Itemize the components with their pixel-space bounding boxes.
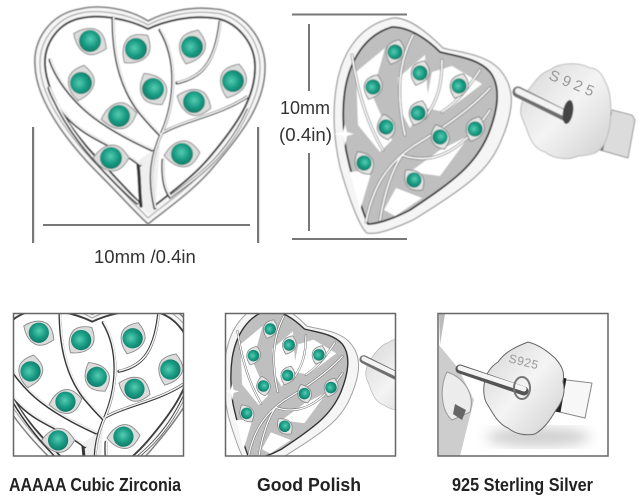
front view heart earring: [35, 7, 265, 224]
height dimension top line: [292, 14, 407, 16]
width label: 10mm /0.4in: [94, 246, 196, 267]
caption: sterling silver: 925 Sterling Silver: [452, 475, 593, 495]
height dimension lower stroke: [308, 153, 310, 231]
height label: [279, 98, 332, 145]
side view heart earring with back clasp: [334, 18, 635, 233]
height label: 10mm: [280, 98, 330, 118]
caption: good polish: Good Polish: [257, 475, 361, 495]
panel: 925 sterling silver detail: S925: [507, 351, 540, 372]
width dimension right tick: [257, 127, 259, 243]
panel: 925 sterling silver detail: [438, 314, 608, 456]
height dimension bottom line: [292, 238, 407, 240]
panel: cubic zirconia detail: [12, 312, 184, 457]
caption: cubic zirconia: AAAAA Cubic Zirconia: [9, 475, 182, 495]
height dimension upper stroke: [308, 24, 310, 91]
panel: good polish detail: [224, 312, 396, 457]
width dimension left tick: [32, 127, 34, 243]
width dimension line: [43, 224, 250, 226]
height label: (0.4in): [279, 125, 332, 145]
clasp engraving: S925: [547, 67, 600, 102]
